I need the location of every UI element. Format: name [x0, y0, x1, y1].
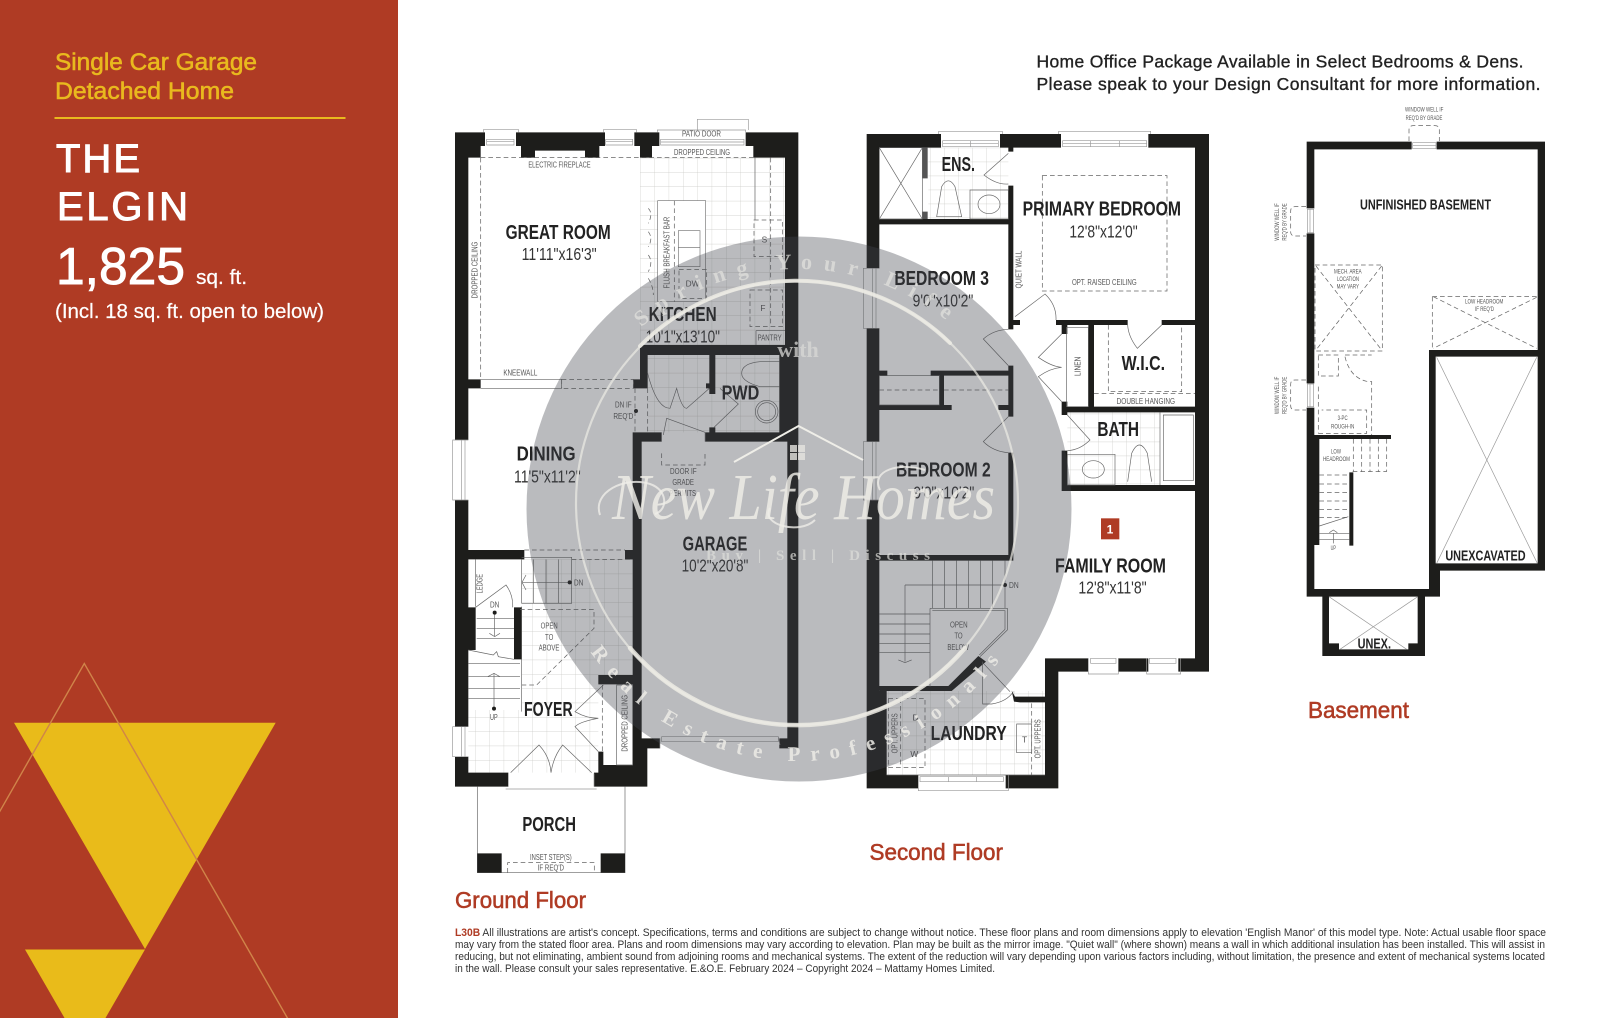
small annotations: ABOVE — [539, 643, 560, 653]
room labels: 9'0"x10'2" — [913, 482, 974, 502]
small annotations: UP — [490, 712, 498, 722]
room labels: FAMILY ROOM — [1055, 555, 1166, 577]
home type heading line two: Detached Home — [55, 78, 234, 105]
floor label: Ground Floor: Ground Floor — [455, 887, 586, 913]
home office note — [1036, 52, 1540, 94]
tile flooring — [887, 148, 1160, 775]
home office note: Please speak to your Design Consultant for more information. — [1036, 74, 1540, 94]
small annotations — [890, 250, 1175, 759]
small annotations: IF REQ'D — [538, 863, 564, 873]
small annotations: WINDOW WELL IF — [1274, 203, 1281, 241]
powder room fixtures — [755, 400, 778, 423]
interior details — [468, 362, 779, 873]
small annotations: KNEEWALL — [503, 367, 538, 377]
small annotations: W — [910, 749, 918, 759]
small annotations: LOW HEADROOM — [1465, 298, 1503, 305]
stair node dots — [492, 409, 638, 711]
small annotations: WINDOW WELL IF — [1274, 377, 1281, 414]
windows and doors — [453, 119, 780, 789]
small annotations: OPT. UPPERS — [1032, 719, 1042, 758]
walls — [455, 132, 798, 787]
dashed ceilings and closets — [879, 176, 1195, 775]
small annotations: WINDOW WELL IF — [1405, 107, 1443, 114]
room labels: UNFINISHED BASEMENT — [1360, 197, 1491, 213]
small annotations: INSET STEP(S) — [530, 852, 572, 862]
small annotations: MAY VARY — [1337, 283, 1359, 290]
small annotations: LINEN — [1073, 357, 1083, 376]
small annotations: DW — [686, 279, 700, 289]
floor label: Basement: Basement — [1308, 697, 1410, 723]
small annotations: DOUBLE HANGING — [1117, 396, 1175, 406]
stair and fixtures — [1319, 517, 1349, 543]
small annotations: ROUGH-IN — [1331, 423, 1354, 430]
small annotations: OPT. UPPERS — [890, 713, 900, 753]
room labels: 11'11"x16'3" — [522, 244, 597, 264]
seal icon: roof — [734, 426, 863, 462]
room labels: BEDROOM 2 — [896, 460, 991, 482]
room labels: LAUNDRY — [931, 723, 1007, 745]
small annotations: OPEN — [950, 619, 968, 629]
room labels: ENS. — [942, 154, 975, 176]
second floor plan — [863, 131, 1209, 791]
seal script name: New Life Homes — [611, 461, 995, 534]
dashed ceilings and steps — [508, 388, 705, 873]
small annotations: DN — [490, 599, 499, 609]
disclaimer text: in the wall. Please consult your sales representative. E.&O.E. February 2024 – Copyright 2024 – Mattamy Homes Limited. — [455, 963, 995, 975]
square footage number: 1,825 — [56, 238, 185, 296]
seal tagline: Buy | Sell | Discuss — [706, 548, 930, 564]
room labels: UNEX. — [1358, 636, 1391, 652]
small annotations: S — [762, 235, 768, 245]
divider rule — [54, 117, 346, 119]
small annotations: LEDGE — [474, 574, 484, 593]
walls — [867, 134, 1209, 788]
room labels: PWD — [722, 382, 759, 404]
watermark: New Life Homes seal — [526, 236, 1072, 782]
porch pillars — [477, 853, 625, 873]
room labels: BATH — [1097, 419, 1139, 441]
room labels: BEDROOM 3 — [894, 268, 989, 290]
small annotations: BELOW — [947, 642, 969, 652]
small annotations: PERMITS — [669, 488, 696, 498]
small annotations: OPEN — [541, 621, 558, 631]
shower partition — [922, 148, 928, 219]
walls — [1307, 142, 1545, 656]
small annotations: ELECTRIC FIREPLACE — [528, 159, 591, 169]
room labels: 10'2"x20'8" — [682, 556, 748, 576]
room labels: W.I.C. — [1122, 353, 1165, 375]
small annotations: TO — [545, 632, 554, 642]
windows and excavation crosses — [1307, 143, 1537, 649]
windows — [863, 131, 1181, 791]
small annotations: FLUSH BREAKFAST BAR — [661, 217, 671, 288]
seal ring — [576, 281, 1018, 725]
panel: left sidebar — [0, 0, 398, 1018]
small annotations: UP — [1331, 545, 1336, 552]
small annotations: DN IF — [615, 400, 632, 410]
note marker 1: 1 — [1107, 522, 1114, 536]
ground floor plan — [453, 119, 798, 873]
small annotations: QUIET WALL — [1014, 250, 1024, 288]
room labels: PRIMARY BEDROOM — [1023, 199, 1181, 221]
basement plan — [1274, 107, 1545, 656]
small annotations — [469, 129, 782, 873]
small annotations: F — [760, 303, 765, 313]
room labels: 12'8"x11'8" — [1078, 577, 1147, 597]
room labels: UNEXCAVATED — [1445, 549, 1526, 565]
room labels — [506, 222, 759, 836]
disclaimer text — [455, 927, 1546, 975]
small annotations: REQ'D BY GRADE — [1282, 203, 1289, 241]
room labels — [1358, 197, 1526, 652]
kitchen island and appliances — [481, 158, 785, 388]
small annotations: T — [1022, 735, 1027, 745]
dashed window wells and rough-ins — [1291, 126, 1537, 517]
small annotations: IF REQ'D — [1475, 306, 1494, 313]
small annotations: D — [912, 713, 918, 723]
small annotations: REQ'D BY GRADE — [1406, 115, 1443, 122]
room labels — [894, 154, 1181, 745]
open to below note: (Incl. 18 sq. ft. open to below) — [55, 300, 324, 323]
room labels: DINING — [517, 444, 576, 466]
small annotations: DN — [1009, 580, 1019, 590]
seal arc text: Real Estate Professionals: Real Estate Professionals — [590, 644, 998, 761]
small annotations — [1274, 107, 1503, 552]
room labels: FOYER — [524, 699, 573, 721]
room labels: KITCHEN — [649, 304, 717, 326]
room labels: 12'8"x12'0" — [1069, 221, 1138, 241]
small annotations: REQ'D — [613, 411, 633, 421]
small annotations: DROPPED CEILING — [620, 695, 630, 752]
disclaimer text: L30B All illustrations are artist's concept. Specifications, terms and conditions are subject to change without notice. These floor plans and room dimensions apply to elevation 'English Manor' of this model type. Note: Actual usable floor space — [455, 927, 1546, 939]
small annotations: PANTRY — [758, 333, 782, 343]
room labels: 10'1"x13'10" — [646, 326, 720, 346]
small annotations: LOCATION — [1337, 276, 1359, 283]
room labels: GARAGE — [683, 534, 747, 556]
interior fixtures and doors — [879, 148, 1193, 775]
stair node dot — [1003, 583, 1007, 587]
room labels: GREAT ROOM — [506, 222, 611, 244]
small annotations: REQ'D BY GRADE — [1282, 376, 1289, 414]
small annotations: HEADROOM — [1323, 456, 1350, 463]
small annotations: 3-PC — [1338, 415, 1348, 422]
disclaimer text: reducing, but not eliminating, ambient sound from adjoining rooms and mechanical systems. The extent of the reduction will vary depending upon various factors including, without limitation, the presence and extent of mechanical systems located — [455, 951, 1545, 963]
small annotations: DROPPED CEILING — [674, 147, 730, 157]
seal disc — [526, 236, 1072, 782]
small annotations: DROPPED CEILING — [469, 242, 479, 298]
seal arc text: Spring Your Life: Spring Your Life — [634, 254, 950, 326]
room labels: 9'0"x10'2" — [913, 291, 973, 311]
home office note: Home Office Package Available in Select Bedrooms & Dens. — [1036, 52, 1524, 72]
model name: THE: THE — [56, 137, 140, 181]
small annotations: LOW — [1331, 448, 1341, 455]
floor label: Second Floor: Second Floor — [870, 839, 1003, 865]
room labels: 11'5"x11'2" — [514, 466, 581, 486]
small annotations: GRADE — [672, 477, 694, 487]
note marker 1 — [1101, 518, 1119, 539]
small annotations: DOOR IF — [670, 466, 697, 476]
small annotations: PATIO DOOR — [682, 129, 721, 139]
disclaimer text: may vary from the stated floor area. Plans and room dimensions may vary according to elevation. Plan may be built as the mirror image. "Quiet wall" (where shown) means a wall in which additional insulation has been installed. This will assist in — [455, 939, 1545, 951]
decorative triangles — [0, 664, 300, 1018]
model name: ELGIN: ELGIN — [57, 185, 188, 229]
square footage unit: sq. ft. — [196, 267, 247, 289]
home type heading: Single Car Garage — [55, 49, 257, 76]
room labels: PORCH — [522, 814, 576, 836]
small annotations: TO — [954, 630, 963, 640]
tile flooring — [640, 158, 785, 432]
small annotations: OPT. RAISED CEILING — [1072, 277, 1137, 287]
small annotations: MECH. AREA — [1334, 268, 1362, 275]
seal word: with: with — [777, 337, 819, 362]
small annotations: DN — [574, 578, 583, 588]
